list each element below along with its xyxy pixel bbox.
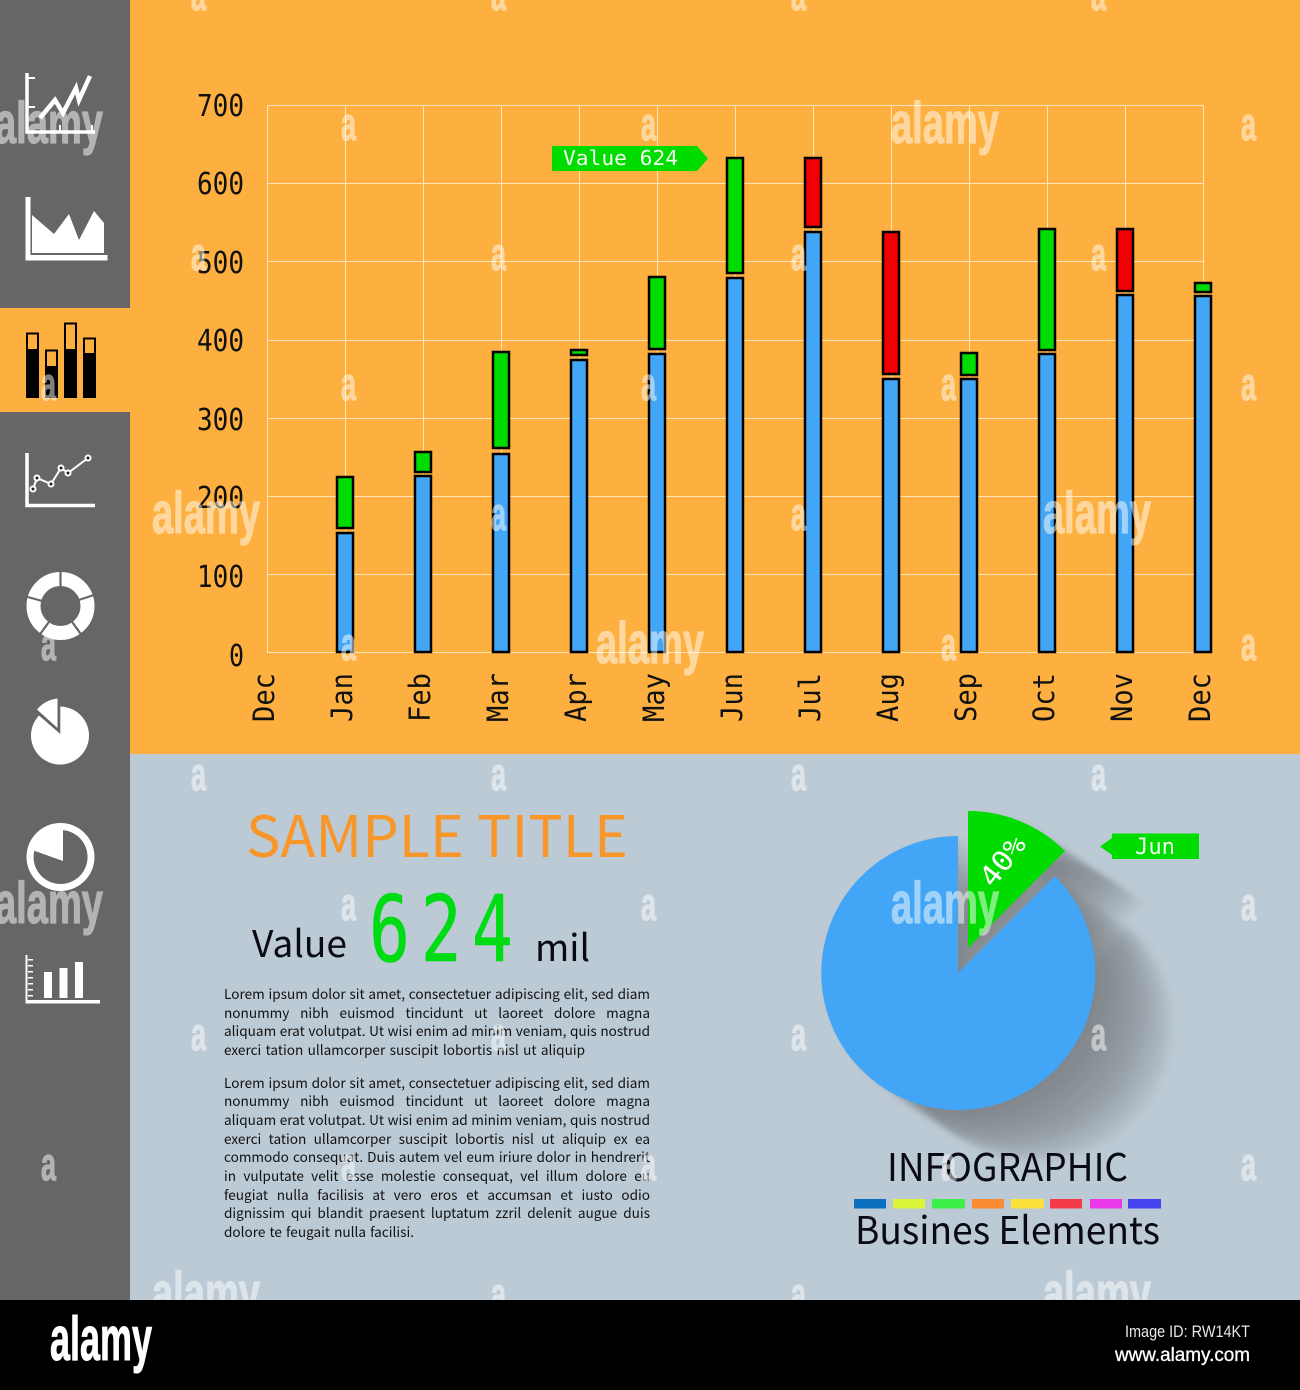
watermark overlay: a (641, 1138, 656, 1190)
callout: Jun (1100, 834, 1199, 860)
value readout: mil (535, 918, 590, 972)
x axis labels: Jun (715, 673, 749, 722)
watermark overlay: a (1241, 98, 1256, 150)
watermark overlay: a (1241, 878, 1256, 930)
text block: paragraph two (224, 1072, 650, 1241)
y axis labels: 400 (197, 324, 244, 359)
text block: paragraph one: Lorem ipsum dolor sit amet, consectetuer adipiscing elit, sed diam (224, 983, 650, 1003)
watermark overlay: a (341, 98, 356, 150)
pie main slice (821, 836, 1095, 1110)
watermark overlay: a (491, 1008, 506, 1060)
watermark overlay: a (341, 878, 356, 930)
watermark overlay: a (41, 618, 56, 670)
text block: paragraph two: in vulputate velit esse molestie consequat, vel illum dolore eu (224, 1165, 650, 1185)
watermark overlay: a (1091, 1008, 1106, 1060)
callout: value 624: Value 624 (563, 146, 678, 170)
y axis labels: 100 (197, 560, 244, 595)
footer url: www.alamy.com (1114, 1345, 1250, 1366)
heading: business elements: Busines Elements (855, 1200, 1160, 1255)
y axis labels: 300 (197, 403, 244, 438)
watermark overlay: alamy (152, 481, 260, 546)
text block: paragraph two: nonummy nibh euismod tincidunt ut laoreet dolore magna (224, 1090, 650, 1110)
icon: segmented donut (24, 568, 97, 637)
watermark overlay: a (791, 488, 806, 540)
y axis labels (197, 89, 244, 674)
text block: paragraph one: exerci tation ullamcorper suscipit lobortis nisl ut aliquip (224, 1039, 585, 1059)
watermark overlay: a (941, 618, 956, 670)
callout: value 624 (552, 146, 708, 171)
text block: paragraph two: aliquam erat volutpat. Ut wisi enim ad minim veniam, quis nostrud (224, 1109, 650, 1129)
watermark overlay: a (941, 358, 956, 410)
watermark overlay: alamy (891, 91, 999, 156)
watermark overlay: a (1241, 358, 1256, 410)
watermark overlay: a (641, 878, 656, 930)
watermark overlay: alamy (1043, 481, 1151, 546)
pie percent label: 40% (973, 829, 1033, 893)
watermark overlay: a (791, 228, 806, 280)
text block: paragraph two: dignissim qui blandit praesent luptatum zzril delenit augue duis (224, 1202, 650, 1222)
icon: column chart (26, 955, 100, 1004)
icon: ring pie chart (26, 823, 94, 891)
watermark overlay: a (1241, 1138, 1256, 1190)
watermark overlay: a (341, 618, 356, 670)
x axis labels: May (637, 673, 671, 722)
x axis labels: Jul (793, 673, 827, 722)
footer logo: alamy (50, 1305, 152, 1374)
watermark overlay: a (491, 228, 506, 280)
color swatches (854, 1199, 1161, 1208)
text block: paragraph one: nonummy nibh euismod tincidunt ut laoreet dolore magna (224, 1002, 650, 1022)
watermark overlay: a (491, 748, 506, 800)
watermark overlay: a (341, 1138, 356, 1190)
panel: chart background (130, 0, 1300, 754)
heading: sample title: SAMPLE TITLE (246, 792, 628, 874)
x axis labels: Jan (325, 673, 359, 722)
value readout: Value (252, 914, 347, 968)
watermark overlay: a (1091, 748, 1106, 800)
x axis labels: Sep (949, 673, 983, 722)
x axis labels: Mar (481, 673, 515, 722)
text block: paragraph two: feugiat nulla facilisis at vero eros et accumsan et iusto odio (224, 1184, 650, 1204)
big number: 624 (369, 877, 513, 984)
watermark overlay: a (1241, 618, 1256, 670)
watermark overlay: alamy (891, 871, 999, 936)
watermark overlay: a (41, 1138, 56, 1190)
watermark overlay: a (191, 228, 206, 280)
icon: dotted line chart (27, 453, 95, 506)
x axis labels: Dec (247, 673, 281, 722)
footer image id: Image ID: RW14KT (1125, 1322, 1250, 1341)
footer bar (0, 1300, 1300, 1390)
y axis labels: 0 (229, 639, 244, 674)
sidebar active tab (0, 308, 130, 412)
icon: pie chart with wedge (31, 698, 89, 764)
icon: area chart (26, 197, 108, 260)
pie highlighted slice (968, 811, 1065, 948)
chart: pie with long shadow (821, 811, 1173, 1162)
watermark overlay: a (191, 1008, 206, 1060)
text block: paragraph two: dolore te feugait nulla facilisi. (224, 1221, 414, 1241)
watermark overlay: a (341, 358, 356, 410)
text block: paragraph two: exerci tation ullamcorper suscipit lobortis nisl ut aliquip ex ea (224, 1128, 650, 1148)
watermark overlay: a (791, 748, 806, 800)
icon: zigzag line chart (27, 73, 95, 132)
panel: sidebar (0, 0, 130, 1300)
watermark overlay: a (941, 1138, 956, 1190)
heading: infographic: INFOGRAPHIC (887, 1137, 1128, 1192)
y axis labels: 600 (197, 167, 244, 202)
watermark overlay: a (641, 98, 656, 150)
watermark overlay: a (41, 358, 56, 410)
watermark overlay: a (641, 358, 656, 410)
y axis labels: 500 (197, 246, 244, 281)
x axis labels: Nov (1105, 673, 1139, 722)
text block: paragraph one: aliquam erat volutpat. Ut wisi enim ad minim veniam, quis nostrud (224, 1020, 650, 1040)
watermark overlay: a (491, 488, 506, 540)
x axis labels: Aug (871, 673, 905, 722)
watermark overlay: a (1091, 228, 1106, 280)
bars (337, 158, 1211, 652)
x axis labels (247, 673, 1217, 722)
watermark overlay: a (191, 748, 206, 800)
watermark overlay: alamy (596, 611, 704, 676)
watermark overlay: a (791, 1008, 806, 1060)
text block: paragraph one (224, 983, 650, 1059)
text block: paragraph two: Lorem ipsum dolor sit amet, consectetuer adipiscing elit, sed diam (224, 1072, 650, 1092)
y axis labels: 700 (197, 89, 244, 124)
value readout (252, 877, 590, 984)
x axis labels: Feb (403, 673, 437, 722)
panel: lower background (130, 754, 1300, 1300)
y axis labels: 200 (197, 481, 244, 516)
callout: Jun: Jun (1135, 835, 1175, 860)
text block: paragraph two: commodo consequat. Duis autem vel eum iriure dolor in hendrerit (224, 1146, 650, 1166)
chart: monthly bars (197, 89, 1217, 722)
x axis labels: Apr (559, 673, 593, 722)
x axis labels: Oct (1027, 673, 1061, 722)
x axis labels: Dec (1183, 673, 1217, 722)
icon: stacked bar chart (27, 324, 95, 397)
